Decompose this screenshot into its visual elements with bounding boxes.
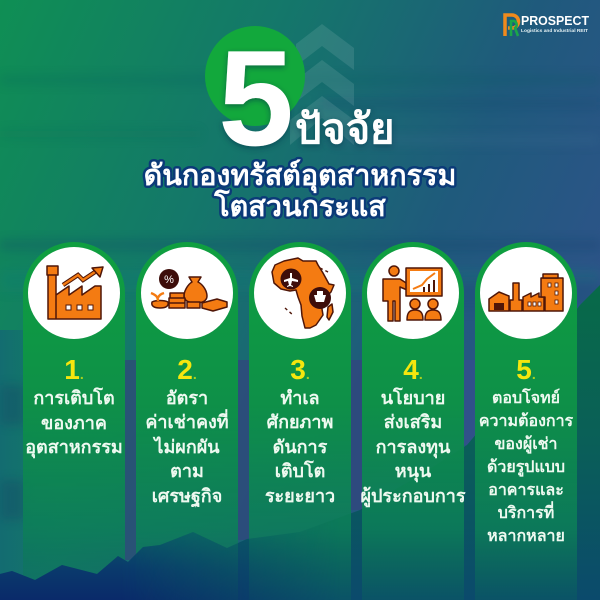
text block: factor 4: นโยบาย xyxy=(381,387,445,408)
text block: factor 5 xyxy=(479,354,574,545)
text block: factor 2: ตาม xyxy=(170,461,204,481)
text block: factor 5: 5. xyxy=(516,354,536,385)
logo: PROSPECT xyxy=(505,13,589,36)
icon: Africa map with plane and ship xyxy=(272,258,334,328)
subtitle: ดันกองทรัสต์อุตสาหกรรม xyxy=(144,159,456,193)
text block: factor 4: การลงทุน xyxy=(376,437,451,459)
text block: factor 1 xyxy=(25,354,123,459)
text block: factor 3: ระยะยาว xyxy=(265,486,335,506)
text block: factor 1: 1. xyxy=(64,354,84,385)
text block: factor 4: หนุน xyxy=(395,461,432,483)
text block: factor 5: ของผู้เช่า xyxy=(494,435,558,455)
text block: factor 2: อัตรา xyxy=(166,388,208,408)
text block: factor 2: ไม่ผกผัน xyxy=(152,436,220,457)
icon: presenter with chart and audience xyxy=(383,266,442,321)
text block: factor 5: ด้วยรูปแบบ xyxy=(487,458,565,478)
rising chart silhouette: front xyxy=(0,532,303,600)
panel: factor 1 xyxy=(23,242,125,600)
text block: factor 2 xyxy=(145,354,229,508)
chevron arrows xyxy=(290,24,354,145)
logo: PROSPECT: PROSPECT xyxy=(521,13,589,28)
panel: factor 4 xyxy=(362,242,464,600)
text block: factor 4 xyxy=(360,354,466,508)
text block: factor 2: ค่าเช่าคงที่ xyxy=(145,409,229,432)
text block: factor 3: ศักยภาพ xyxy=(267,412,333,432)
text block: factor 5: บริการที่ xyxy=(498,501,554,522)
text block: factor 3: ทำเล xyxy=(280,388,320,408)
text block: factor 5: ตอบโจทย์ xyxy=(492,387,560,407)
text block: factor 3: ดันการ xyxy=(273,437,328,457)
text block: factor 5: ความต้องการ xyxy=(479,412,574,430)
icon: factory with rising arrow xyxy=(47,266,103,319)
panel: factor 3 xyxy=(249,242,351,600)
panel: factor 2 xyxy=(136,242,238,600)
text block: factor 5: หลากหลาย xyxy=(487,528,565,545)
text block: factor 2: เศรษฐกิจ xyxy=(152,486,222,508)
text block: factor 1: อุตสาหกรรม xyxy=(25,437,123,459)
title: 5 factors xyxy=(205,22,395,174)
text block: factor 4: ส่งเสริม xyxy=(384,412,442,432)
text block: factor 1: การเติบโต xyxy=(33,387,115,408)
subtitle xyxy=(144,159,456,223)
green circle behind the 5 xyxy=(205,26,305,126)
icon: money bag and coins: % xyxy=(164,274,174,286)
big number 5: 5 xyxy=(218,22,294,174)
text block: factor 3 xyxy=(265,354,335,506)
panel: factor 5 xyxy=(475,242,577,600)
text block: factor 5: อาคารและ xyxy=(488,482,564,499)
rising chart silhouette: back xyxy=(0,285,600,600)
text block: factor 4: ผู้ประกอบการ xyxy=(360,486,466,508)
text block: factor 4: 4. xyxy=(403,354,423,385)
heading word: ปัจจัย xyxy=(295,105,395,152)
icon: money bag and coins xyxy=(151,269,227,311)
logo: PROSPECT: Logistics and Industrial REIT xyxy=(521,28,588,33)
subtitle: โตสวนกระแส xyxy=(213,188,386,223)
text block: factor 3: เติบโต xyxy=(275,460,325,481)
text block: factor 1: ของภาค xyxy=(41,413,107,433)
text block: factor 3: 3. xyxy=(290,354,310,385)
icon: warehouses and buildings xyxy=(489,274,563,311)
text block: factor 2: 2. xyxy=(177,354,197,385)
